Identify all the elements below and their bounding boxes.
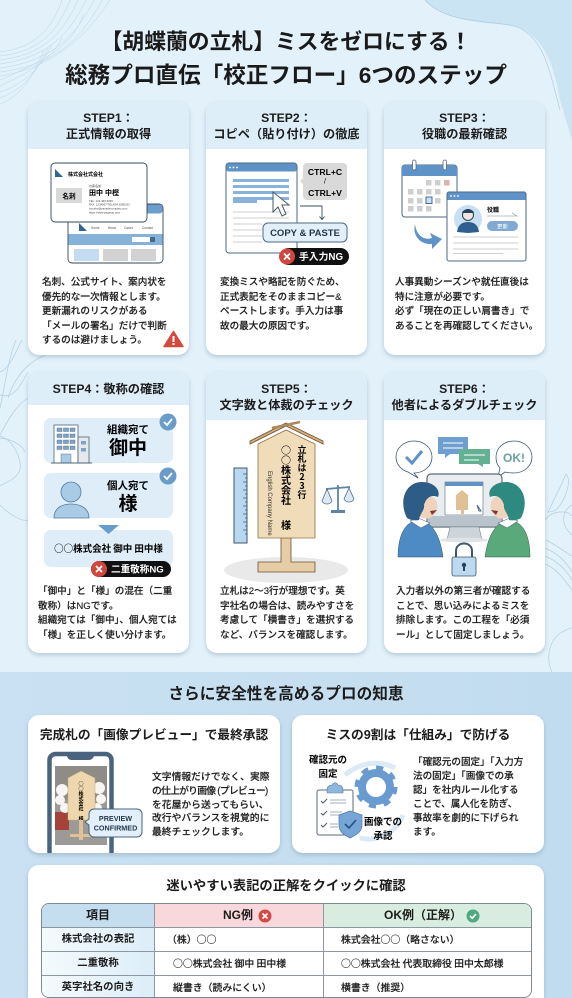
- panel: step 4: [28, 372, 189, 653]
- section band: pro tips: [0, 672, 572, 998]
- illustration: gear clipboard shield: 固定: [318, 768, 338, 780]
- heading: step 1: [28, 102, 189, 149]
- text: step 1: 更新漏れのリスクがある: [42, 306, 148, 317]
- illustration: wooden sign: ○○株式会社: [278, 445, 294, 506]
- icon: copy and paste window: CTRL+V: [308, 188, 342, 198]
- icon: business card and website: https://www.pagetop.com: [89, 210, 121, 214]
- icon: business card and website: お客名前: [89, 183, 101, 188]
- table: 株式会社の表記: [62, 934, 134, 945]
- icon: business card and website: 株式会社式会社: [68, 171, 103, 178]
- heading: step 5: STEP5：: [261, 382, 312, 396]
- text: step 5: 考慮して「横書き」を選択する: [220, 615, 354, 626]
- icon: business card and website: 名刺: [62, 192, 76, 200]
- diagram: honorific usage: 個人宛て: [107, 479, 149, 492]
- text: step 4: [38, 585, 177, 640]
- illustration: two people checking: [396, 437, 532, 576]
- diagram: honorific usage: 組織宛て: [107, 423, 149, 436]
- icon: calendar and profile: [402, 160, 526, 262]
- text: image preview: の仕上がり画像 (プレビュー): [152, 786, 268, 797]
- icon: business card and website: ◣: [55, 169, 63, 178]
- table: 項目: [86, 908, 110, 922]
- text: system prevention: 法の固定」「画像での承: [413, 771, 514, 782]
- heading: step 1: 正式情報の取得: [66, 127, 151, 141]
- illustration: two people checking: OK!: [503, 451, 525, 465]
- text: step 1: [42, 276, 167, 346]
- icon: calendar and profile: 役職: [487, 206, 499, 214]
- text: step 4: 敬称）はNGです。: [38, 600, 119, 612]
- text: step 3: 必ず「現在の正しい肩書き」で: [395, 306, 529, 317]
- illustration: wooden sign: 立札は23行: [296, 444, 308, 500]
- text: step 4: 「御中」と「様」の混在（二重: [38, 586, 172, 597]
- text: system prevention: [413, 756, 523, 838]
- heading: step 6: [384, 372, 545, 420]
- text: image preview: [152, 772, 270, 838]
- heading: step 5: [206, 372, 367, 420]
- illustration: wooden sign: [224, 420, 354, 583]
- text: image preview: 文字情報だけでなく、実際: [152, 772, 270, 783]
- illustration: gear clipboard shield: 承認: [373, 830, 393, 842]
- diagram: honorific usage: ○○株式会社 御中 田中様: [54, 541, 163, 555]
- icon: copy and paste window: 手入力NG: [299, 250, 343, 263]
- icon: business card and website: Cases: [124, 226, 133, 230]
- heading: step 6: 他者によるダブルチェック: [392, 398, 537, 412]
- illustration: gear clipboard shield: 画像での: [364, 816, 402, 828]
- illustration: gear clipboard shield: [309, 754, 406, 842]
- text: step 4: 組織宛ては「御中」、個人宛ては: [38, 615, 177, 626]
- table: ○○株式会社 代表取締役 田中太郎様: [341, 956, 503, 970]
- panel: system prevention: [292, 715, 544, 853]
- panel: step 2: [206, 102, 367, 355]
- icon: business card and website: Home: [91, 226, 100, 230]
- panel: step 1: [28, 102, 189, 355]
- diagram: honorific usage: 二重敬称NG: [111, 564, 164, 576]
- text: step 5: [220, 585, 354, 640]
- icon: copy and paste window: CTRL+C: [308, 167, 342, 177]
- table: ○○株式会社 御中 田中様: [173, 956, 286, 970]
- illustration: wooden sign: English Company Name: [266, 471, 272, 536]
- text: image preview: 改行やバランスを視覚的に: [152, 813, 269, 824]
- panel: quick check table: [28, 865, 544, 998]
- text: step 6: ール」として固定しましょう。: [396, 630, 529, 640]
- heading: system prevention: ミスの9割は「仕組み」で防げる: [326, 728, 510, 742]
- text: step 2: [220, 276, 345, 332]
- table: 英字社名の向き: [62, 982, 134, 993]
- icon: business card and website: News: [108, 226, 116, 230]
- illustration: phone preview: [47, 752, 142, 853]
- text: system prevention: ことで、属人化を防ぎ、: [413, 799, 517, 810]
- heading: step 1: STEP1：: [83, 111, 134, 125]
- table: 二重敬称: [77, 958, 119, 969]
- heading: step 4: [28, 372, 189, 405]
- icon: business card and website: ◣: [79, 223, 87, 232]
- text: step 6: 入力者以外の第三者が確認する: [396, 586, 530, 597]
- panel: image preview: [28, 715, 280, 853]
- text: system prevention: 認」を社内ルール化する: [413, 785, 519, 796]
- text: image preview: 最終チェックします。: [152, 827, 249, 838]
- table: 株式会社○○（略さない）: [341, 932, 460, 946]
- icon: copy and paste window: [226, 162, 349, 265]
- icon: business card and website: furusho@samplecompany.com: [89, 206, 128, 210]
- heading: step 3: 役職の最新確認: [422, 127, 507, 141]
- text: step 6: ことで、思い込みによるミスを: [396, 600, 529, 612]
- heading: quick check table: 迷いやすい表記の正解をクイックに確認: [166, 878, 406, 893]
- icon: warning: [163, 330, 184, 348]
- title: 総務プロ直伝「校正フロー」6つのステップ: [65, 63, 507, 88]
- heading: step 3: STEP3：: [439, 111, 490, 125]
- table: 縦書き（読みにくい）: [173, 980, 272, 994]
- panel: step 5: [206, 372, 367, 653]
- icon: business card and website: [50, 162, 164, 264]
- text: step 1: するのは避けましょう。: [42, 335, 147, 346]
- heading: step 2: コピペ（貼り付け）の徹底: [213, 127, 360, 141]
- title: [65, 29, 507, 88]
- diagram: honorific usage: [44, 414, 176, 577]
- icon: business card and website: 田中 中樫: [89, 188, 119, 197]
- text: system prevention: 事故率を劇的に下げられ: [413, 813, 519, 824]
- panel: step 6: [384, 372, 545, 653]
- icon: copy and paste window: /: [324, 178, 326, 186]
- heading: step 5: 文字数と体裁のチェック: [219, 398, 354, 412]
- table: OK例（正解）: [384, 908, 462, 922]
- text: step 2: 変換ミスや略記を防ぐため、: [220, 277, 345, 288]
- icon: business card and website: FAX: 1234567/TEL/654.6385322: [89, 202, 130, 206]
- heading: step 3: [384, 102, 545, 149]
- icon: business card and website: TEL: 123.466.5299: [89, 199, 113, 203]
- heading: pro tips: さらに安全性を高めるプロの知恵: [168, 686, 404, 703]
- text: step 1: 「メールの署名」だけで判断: [42, 320, 167, 332]
- table: [41, 903, 532, 998]
- text: step 3: [395, 276, 538, 332]
- title: 【胡蝶蘭の立札】ミスをゼロにする！: [101, 29, 471, 54]
- text: step 5: 立札は2〜3行が理想です。英: [220, 586, 345, 597]
- illustration: phone preview: ○○株式会社 様: [78, 781, 84, 821]
- text: step 3: 人事異動シーズンや就任直後は: [395, 277, 529, 288]
- text: step 2: ペーストします。手入力は事: [220, 306, 343, 317]
- heading: step 6: STEP6：: [439, 382, 490, 396]
- heading: step 2: [206, 102, 367, 149]
- text: system prevention: 「確認元の固定」「入力方: [413, 757, 523, 768]
- icon: business card and website: Contact: [142, 226, 153, 230]
- illustration: phone preview: CONFIRMED: [94, 824, 137, 832]
- text: system prevention: ます。: [413, 827, 441, 838]
- text: step 5: 字社名の場合は、読みやすさを: [220, 600, 354, 612]
- icon: copy and paste window: COPY & PASTE: [270, 228, 340, 239]
- text: step 1: 優先的な一次情報とします。: [42, 292, 166, 302]
- text: step 6: [396, 585, 530, 640]
- text: step 3: あることを再確認してください。: [395, 320, 538, 332]
- text: step 1: 名刺、公式サイト、案内状を: [42, 277, 167, 288]
- text: image preview: を花屋から送ってもらい、: [152, 800, 269, 811]
- text: step 6: 排除します。この工程を「必須: [396, 615, 529, 626]
- heading: image preview: 完成札の「画像プレビュー」で最終承認: [40, 728, 268, 742]
- illustration: gear clipboard shield: 確認元の: [309, 754, 347, 766]
- table: （株）○○: [167, 932, 216, 946]
- text: step 2: 故の最大の原因です。: [220, 320, 315, 332]
- diagram: honorific usage: 様: [118, 493, 138, 515]
- text: step 4: 「様」を正しく使い分けます。: [38, 630, 171, 640]
- table: 横書き（推奨）: [341, 980, 410, 994]
- heading: step 4: STEP4：敬称の確認: [53, 382, 164, 396]
- illustration: wooden sign: 様: [278, 519, 294, 531]
- text: step 5: など、バランスを確認します。: [220, 630, 353, 640]
- illustration: phone preview: PREVIEW: [99, 814, 132, 823]
- panel: step 3: [384, 102, 545, 355]
- text: step 3: 特に注意が必要です。: [395, 292, 490, 302]
- table: NG例: [223, 908, 253, 922]
- heading: step 2: STEP2：: [261, 111, 312, 125]
- diagram: honorific usage: 御中: [109, 437, 147, 459]
- icon: calendar and profile: 更新: [497, 222, 508, 230]
- text: step 2: 正式表記をそのままコピー&: [220, 292, 342, 302]
